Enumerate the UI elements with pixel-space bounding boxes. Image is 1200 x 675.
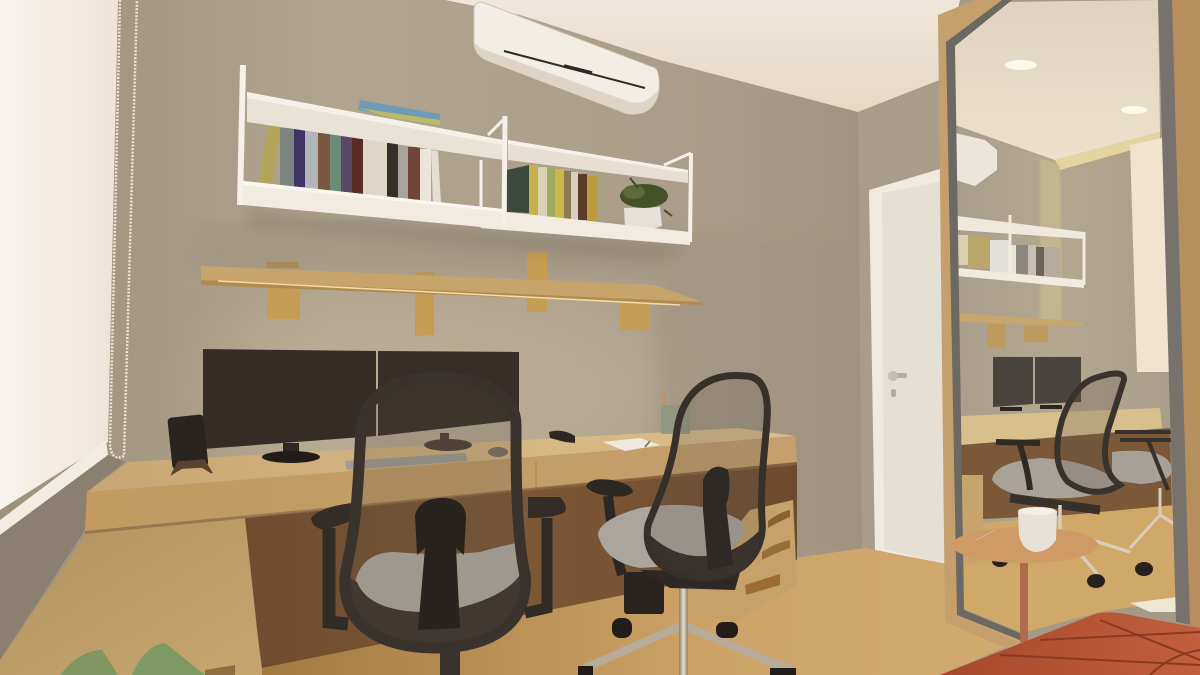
lower shelf boards xyxy=(243,181,503,229)
arm xyxy=(586,479,633,575)
backrest xyxy=(647,376,767,578)
white floor strip xyxy=(1130,597,1179,612)
gray mirror frame left and top xyxy=(946,0,1022,641)
door with frame xyxy=(869,166,952,568)
arms xyxy=(311,497,566,624)
right wood panel xyxy=(1172,0,1200,630)
reflected white shelves xyxy=(957,215,1084,288)
air conditioner xyxy=(474,2,659,114)
backrest lower bowl xyxy=(343,570,531,652)
books right xyxy=(507,165,597,221)
lumbar spine xyxy=(415,498,466,630)
reflected wall glow xyxy=(1040,158,1062,320)
waste bin xyxy=(624,572,664,614)
lumbar spine xyxy=(703,467,733,570)
red upholstered bench xyxy=(940,612,1200,675)
green cushions xyxy=(60,643,205,675)
desk top xyxy=(87,428,795,492)
wardrobe wood and frame xyxy=(938,0,1200,650)
backrest xyxy=(345,378,525,648)
reflected chairs xyxy=(992,373,1176,588)
reflected floor xyxy=(964,505,1177,633)
monitor stand right xyxy=(424,433,472,451)
left wood strip xyxy=(938,0,1020,650)
cove light xyxy=(1055,132,1160,170)
frames xyxy=(240,65,691,242)
wooden shelf with light xyxy=(201,252,702,336)
seat xyxy=(598,505,744,568)
plant in white pot xyxy=(620,178,672,230)
paper and pen xyxy=(603,438,660,451)
chair base xyxy=(578,585,796,675)
keyboard and mouse xyxy=(345,447,508,470)
lower left wall xyxy=(0,455,125,660)
right side wall xyxy=(858,78,950,600)
right gray frame xyxy=(1158,0,1192,625)
ceiling lights xyxy=(1005,60,1037,70)
desk front xyxy=(85,436,797,531)
reflected desk xyxy=(961,408,1172,520)
bead chain of blind xyxy=(110,0,137,458)
seat under mechanism xyxy=(640,570,740,590)
seat xyxy=(355,542,524,612)
ceiling xyxy=(445,0,960,112)
pencil cup xyxy=(661,392,690,434)
back wall xyxy=(0,0,960,675)
drawer cabinet xyxy=(690,500,797,622)
bench left xyxy=(0,518,262,675)
reflected scene xyxy=(953,0,1177,633)
chair right xyxy=(578,376,796,675)
window blind xyxy=(0,0,118,535)
brackets xyxy=(266,252,650,336)
phone on stand xyxy=(167,414,212,474)
upper shelf boards xyxy=(247,92,503,160)
reflected wooden shelf xyxy=(960,313,1083,348)
under desk dark panel xyxy=(242,462,797,668)
chair left xyxy=(311,378,566,675)
column xyxy=(440,645,460,675)
stapler xyxy=(549,431,575,443)
reflected drawer xyxy=(962,475,983,567)
books left xyxy=(259,126,441,204)
white cup xyxy=(1018,508,1057,552)
monitor stand left xyxy=(262,443,320,463)
shelf shadow xyxy=(245,208,690,262)
side table xyxy=(952,507,1098,642)
desk xyxy=(85,428,797,534)
books on top xyxy=(358,100,440,125)
reflected ceiling xyxy=(953,0,1160,160)
reflected monitors xyxy=(993,357,1081,411)
white shelves xyxy=(240,65,691,262)
monitors xyxy=(203,349,519,463)
reflected AC xyxy=(955,133,997,186)
door handle xyxy=(888,371,907,397)
reflected window xyxy=(1130,136,1173,372)
mirror xyxy=(953,0,1179,633)
floor xyxy=(262,548,1022,675)
